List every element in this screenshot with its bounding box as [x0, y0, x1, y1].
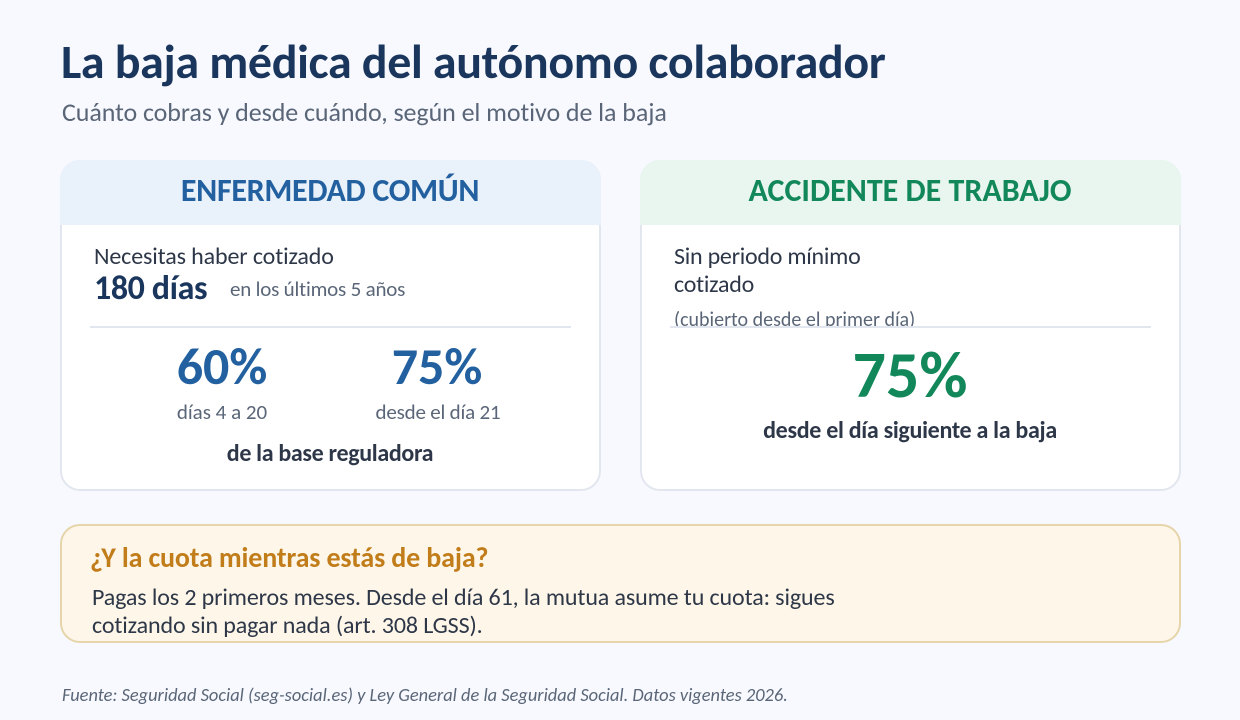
text: requisito de cotización: Necesitas haber cotizado [94, 242, 334, 271]
panel: enfermedad común [60, 160, 600, 490]
text: sin periodo mínimo [674, 242, 860, 299]
panel: accidente de trabajo [640, 160, 1180, 490]
callout text: Pagas los 2 primeros meses. Desde el día 61, la mutua asume tu cuota: sigues [92, 583, 835, 612]
label: días 4 a 20: días 4 a 20 [177, 399, 267, 425]
title: La baja médica del autónomo colaborador [61, 32, 885, 91]
label: desde el día siguiente a la baja: desde el día siguiente a la baja [763, 416, 1057, 445]
callout: cuota [60, 524, 1180, 643]
label: desde el día 21: desde el día 21 [376, 399, 500, 425]
text: sin periodo mínimo: Sin periodo mínimo [674, 242, 860, 271]
stat: 75%: 75% [852, 334, 968, 415]
stat: 180 días: 180 días [94, 268, 207, 309]
stat: 60%: 60% [177, 334, 267, 398]
panel header: enfermedad común [60, 160, 600, 225]
text: en los últimos 5 años: en los últimos 5 años [230, 276, 405, 302]
panel header: accidente de trabajo [640, 160, 1180, 225]
source note: Fuente: Seguridad Social (seg-social.es) y Ley General de la Seguridad Social. Datos vigentes 2026. [62, 683, 788, 706]
heading: accidente de trabajo: ACCIDENTE DE TRABAJO [749, 171, 1071, 210]
callout text [92, 583, 835, 640]
stat: 75%: 75% [392, 334, 482, 398]
text: sin periodo mínimo: cotizado [674, 270, 754, 299]
callout heading: ¿Y la cuota mientras estás de baja? [90, 540, 488, 575]
label: de la base reguladora: de la base reguladora [227, 439, 433, 468]
callout text: cotizando sin pagar nada (art. 308 LGSS). [92, 611, 483, 640]
heading: enfermedad común: ENFERMEDAD COMÚN [181, 171, 479, 210]
subtitle: Cuánto cobras y desde cuándo, según el motivo de la baja [62, 96, 667, 128]
